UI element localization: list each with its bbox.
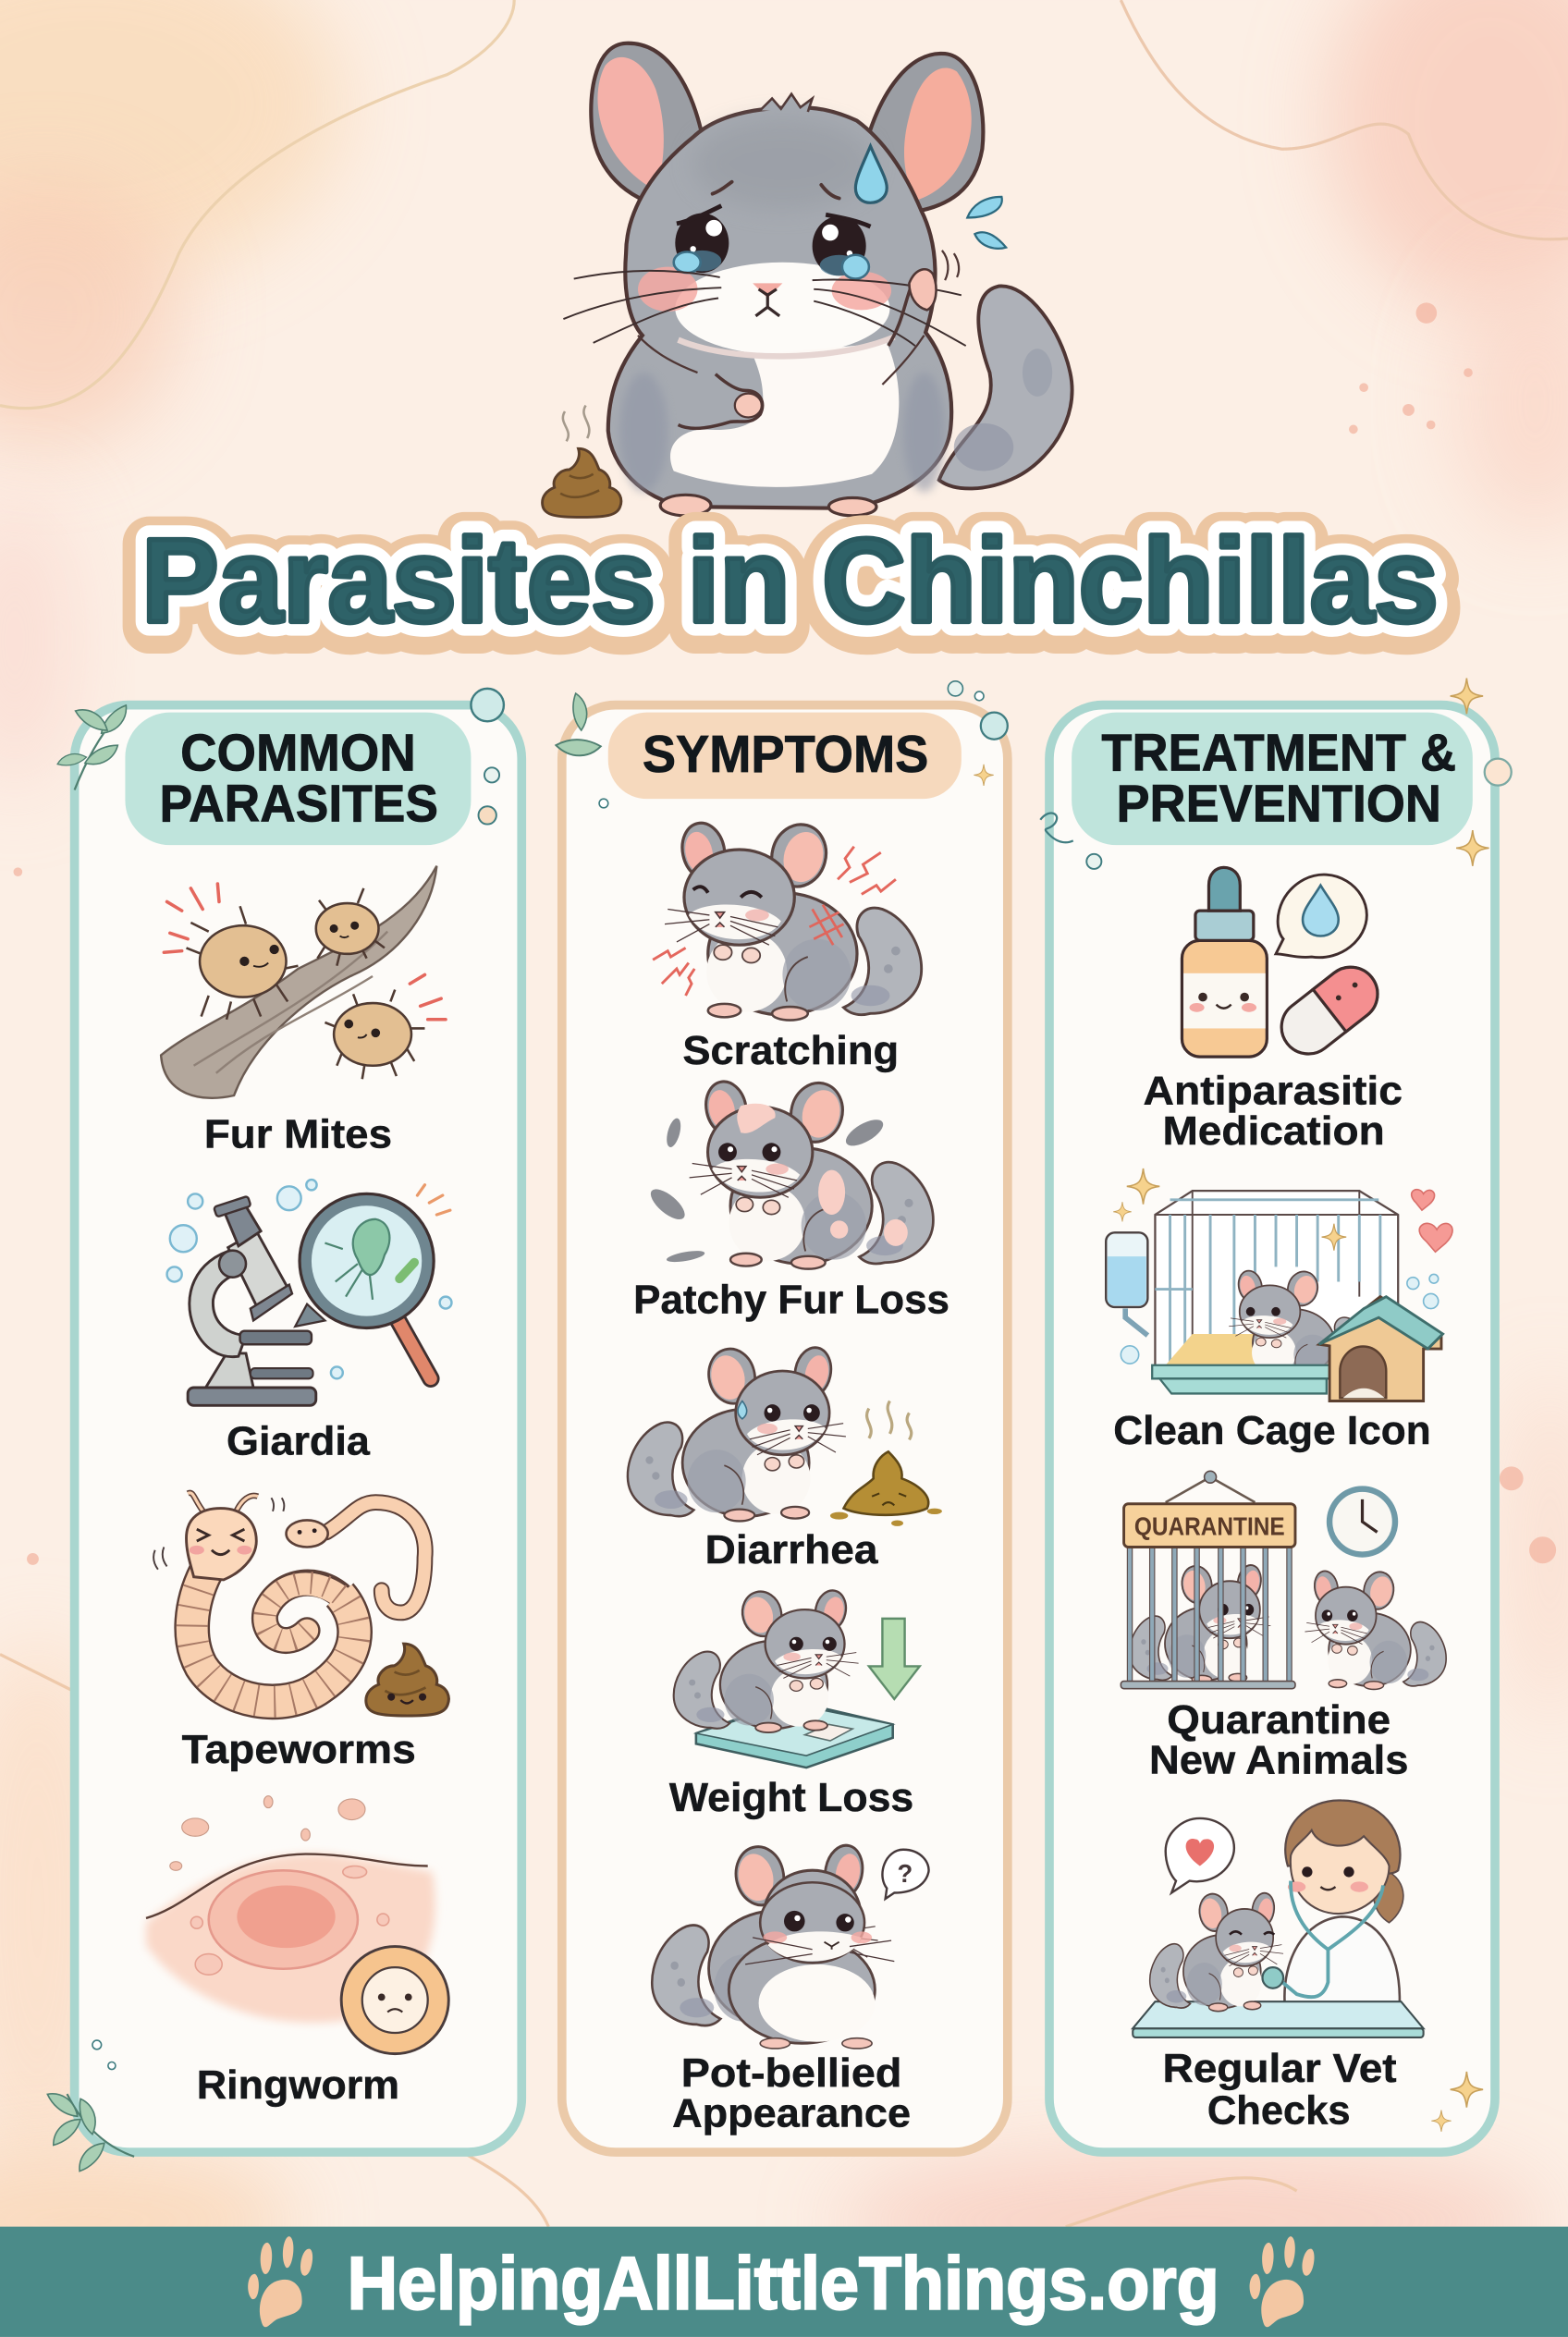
panel: common parasites: [47, 689, 521, 2172]
icon: poop with stink lines: [543, 406, 621, 517]
arm and scratching paw: [679, 251, 959, 428]
label: antiparasitic medication: Antiparasitic: [1144, 1070, 1403, 1114]
panel: symptoms: [556, 681, 1008, 2152]
label: quarantine new animals: Quarantine: [1167, 1698, 1390, 1743]
icon: left paw: [248, 2236, 312, 2327]
tail: [939, 286, 1072, 488]
heading: common parasites: PARASITES: [160, 774, 438, 832]
label: pot-bellied appearance: [672, 2051, 911, 2136]
heading: symptoms: SYMPTOMS: [643, 725, 928, 783]
decoration: leaves and bubbles: [556, 681, 1008, 808]
decoration: bottom sparkles: [1431, 2072, 1483, 2132]
icon: right paw: [1250, 2236, 1315, 2327]
label: pot-bellied appearance: Appearance: [672, 2092, 911, 2136]
illustration: sad chinchilla mascot: [543, 43, 1072, 517]
icon: microscope and magnifier: [167, 1180, 451, 1405]
icon: veterinarian checking chinchilla: [1133, 1800, 1424, 2037]
face: [563, 182, 966, 346]
body and head: [608, 94, 951, 516]
icon: diarrhea chinchilla: [628, 1343, 942, 1526]
label: quarantine new animals: New Animals: [1149, 1739, 1408, 1783]
title: Parasites in Chinchillas: [141, 514, 1439, 647]
label: weight loss: Weight Loss: [669, 1776, 913, 1820]
icon: weight loss scale: [674, 1587, 920, 1768]
icon: fur mites on hair: [161, 866, 446, 1098]
footer text: HelpingAllLittleThings.org: [348, 2242, 1219, 2325]
icon: ringworm skin patch and badge: [146, 1796, 448, 2054]
icon: medication bottle, drop and pill: [1182, 867, 1389, 1065]
title: Parasites in Chinchillas: [141, 514, 1439, 647]
label: patchy fur loss: Patchy Fur Loss: [633, 1278, 949, 1322]
label: diarrhea: Diarrhea: [705, 1528, 878, 1572]
label: ringworm: Ringworm: [197, 2063, 399, 2108]
panel: treatment and prevention: [1040, 679, 1512, 2152]
heading: treatment and prevention: PREVENTION: [1117, 774, 1441, 832]
icon: quarantine cage, sign, clock and chinchillas: [1121, 1471, 1446, 1689]
heading: symptoms: [608, 713, 962, 799]
label: pot-bellied appearance: Pot-bellied: [681, 2051, 901, 2096]
heading: common parasites: COMMON: [180, 724, 416, 782]
label: regular vet checks: Regular Vet: [1162, 2047, 1397, 2091]
label: scratching: Scratching: [682, 1029, 899, 1073]
heading: common parasites: [125, 713, 471, 845]
decoration: bottom leaves: [47, 2040, 134, 2172]
icon: sweat drop: [855, 146, 887, 202]
icon: patchy fur loss chinchilla: [646, 1077, 933, 1269]
decoration: sparkles and bubbles: [1040, 679, 1512, 869]
heading: treatment and prevention: [1072, 713, 1473, 845]
label: giardia: Giardia: [227, 1420, 371, 1464]
title: Parasites in Chinchillas: [141, 519, 1439, 652]
label: regular vet checks: [1162, 2047, 1397, 2133]
label: antiparasitic medication: Medication: [1162, 1109, 1385, 1154]
icon: pot-bellied chinchilla: [652, 1841, 929, 2049]
label: quarantine new animals: [1149, 1698, 1408, 1783]
label: fur mites: Fur Mites: [204, 1112, 392, 1156]
icon: clean cage with chinchilla and house: [1106, 1168, 1452, 1401]
label: clean cage icon: Clean Cage Icon: [1113, 1409, 1431, 1453]
icon: quarantine cage, sign, clock and chinchillas: QUARANTINE: [1134, 1512, 1285, 1541]
icon: scratching chinchilla: [653, 818, 922, 1021]
icon: tapeworms: [153, 1493, 448, 1716]
heading: treatment and prevention: TREATMENT &: [1101, 724, 1456, 782]
icon: water droplets: [967, 197, 1006, 249]
footer bar: [0, 2227, 1568, 2337]
ears: [591, 43, 983, 212]
decoration: leaves and bubbles: [57, 689, 504, 825]
label: regular vet checks: Checks: [1207, 2088, 1351, 2133]
label: antiparasitic medication: [1144, 1070, 1403, 1154]
label: tapeworms: Tapeworms: [182, 1728, 416, 1772]
icon: pot-bellied chinchilla: ?: [898, 1859, 913, 1888]
